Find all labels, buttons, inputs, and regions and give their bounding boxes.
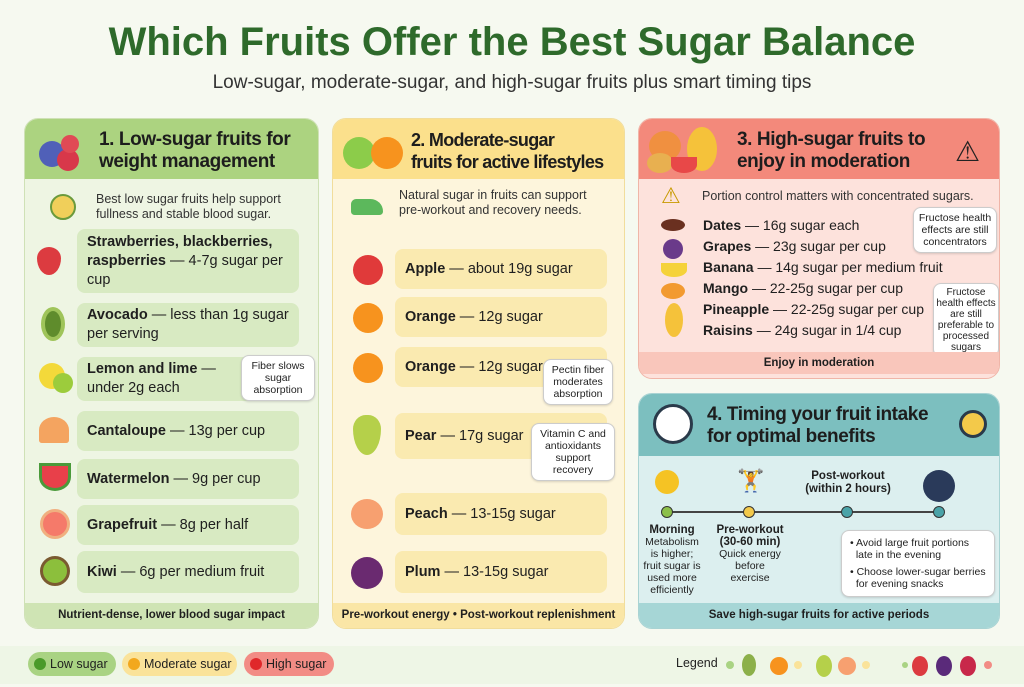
intro text: Natural sugar in fruits can support: [399, 188, 587, 202]
callout: evening: • Avoid large fruit portions: [850, 537, 969, 549]
footer: Nutrient-dense, lower blood sugar impact: [58, 609, 285, 621]
item: orange 2: [395, 347, 607, 387]
icon: badge: [50, 194, 76, 220]
item: apple: Apple — about 19g sugar: [405, 260, 573, 276]
callout: fructose 1: Fructose health effects are still concentrators: [919, 212, 991, 248]
item: kiwi: [77, 551, 299, 593]
list: high sugar fruits: Pineapple — 22-25g sugar per cup: [703, 301, 924, 317]
icon: warning: ⚠: [955, 136, 980, 167]
title: Which Fruits Offer the Best Sugar Balance: [109, 20, 915, 64]
subtitle: Low-sugar, moderate-sugar, and high-sugar fruits plus smart timing tips: [213, 72, 811, 93]
callout: vitamin c: [531, 423, 615, 481]
item: orange: Orange — 12g sugar: [405, 308, 543, 324]
callout: fiber: Fiber slows sugar absorption: [251, 360, 305, 396]
icon: apple orange: [343, 137, 403, 169]
heading: 2. Moderate-sugar: [411, 130, 554, 150]
icon: strawberry: [37, 247, 61, 275]
item: lemon: Lemon and lime —: [87, 361, 216, 377]
footer: Save high-sugar fruits for active periods: [709, 609, 929, 621]
heading: [411, 130, 604, 172]
timeline: (within 2 hours): [805, 483, 891, 495]
icon: warning small: ⚠: [661, 183, 681, 208]
item: berries: Strawberries, blackberries, raspberries — 4-7g sugar per cup: [87, 234, 283, 288]
header: moderate: [333, 119, 624, 179]
list: high sugar fruits: Grapes — 23g sugar per cup: [703, 238, 886, 254]
callout: fructose 1: [913, 207, 997, 253]
callout: pectin: [543, 359, 613, 405]
timeline: Post-workout: [811, 470, 885, 482]
pill: high: [244, 652, 334, 676]
timeline: exercise: [730, 572, 770, 584]
footer: Pre-workout energy • Post-workout replenishment: [342, 609, 615, 621]
heading: 1. Low-sugar fruits for: [99, 129, 290, 150]
item: plum: Plum — 13-15g sugar: [405, 564, 548, 580]
heading: [707, 404, 928, 447]
heading: 4. Timing your fruit intake: [707, 404, 928, 425]
heading: [99, 129, 290, 172]
legend icons: [676, 654, 992, 677]
callout: fructose 2: Fructose health effects are still preferable to processed sugars: [936, 287, 996, 353]
pill: moderate: [122, 652, 237, 676]
list: high sugar fruits: Raisins — 24g sugar in 1/4 cup: [703, 322, 901, 338]
callout: evening: [841, 530, 995, 597]
item: kiwi: Kiwi — 6g per medium fruit: [87, 564, 264, 580]
pill: low: [28, 652, 116, 676]
intro text: Portion control matters with concentrated sugars.: [702, 189, 974, 203]
item: peach: Peach — 13-15g sugar: [405, 506, 556, 522]
callout: pectin: Pectin fiber moderates absorption: [552, 364, 604, 400]
panel: low sugar: [24, 118, 319, 629]
panel: moderate sugar: [332, 118, 625, 629]
footer: [639, 352, 999, 374]
pill: moderate: Moderate sugar: [144, 657, 232, 671]
header: low sugar: [25, 119, 318, 179]
list: high sugar fruits: [661, 217, 943, 338]
callout: evening: late in the evening: [856, 549, 941, 561]
item: lemon: under 2g each: [87, 380, 180, 396]
item: avocado: Avocado — less than 1g sugar per serving: [87, 307, 289, 342]
heading: for optimal benefits: [707, 426, 875, 447]
callout: fiber: [241, 355, 315, 401]
heading: weight management: [99, 151, 275, 172]
item: pear: [395, 413, 607, 459]
callout: evening: for evening snacks: [856, 578, 943, 590]
item: pear: Pear — 17g sugar: [405, 428, 524, 444]
icon: tropical fruits: [647, 127, 717, 173]
list: high sugar fruits: Dates — 16g sugar each: [703, 217, 859, 233]
timeline: Quick energy: [719, 548, 781, 560]
item: grapefruit: Grapefruit — 8g per half: [87, 516, 248, 532]
timeline: 🏋: [737, 468, 764, 493]
intro text: [96, 192, 281, 221]
heading: [737, 129, 925, 172]
timeline: [643, 468, 955, 596]
heading: fruits for active lifestyles: [411, 152, 603, 172]
item: watermelon: Watermelon — 9g per cup: [87, 470, 261, 486]
intro text: Best low sugar fruits help support: [96, 192, 281, 206]
panel: high sugar: [638, 118, 1000, 379]
icon: berries: [39, 135, 79, 171]
pill: low: Low sugar: [50, 657, 108, 671]
item: peach: [395, 493, 607, 535]
item: apple: [395, 249, 607, 289]
legend icons: Legend: [676, 656, 718, 670]
icon: clock: [653, 404, 693, 444]
intro text: pre-workout and recovery needs.: [399, 203, 582, 217]
list: high sugar fruits: Banana — 14g sugar per medium fruit: [703, 259, 943, 275]
intro text: [399, 188, 587, 217]
icon: shoe: [351, 199, 383, 215]
item: lemon: [77, 357, 299, 401]
timeline: (30-60 min): [720, 536, 780, 548]
item: watermelon: [77, 459, 299, 499]
legend bar: [0, 646, 1024, 684]
item: cantaloupe: [77, 411, 299, 451]
header: timing: [639, 394, 999, 456]
callout: vitamin c: Vitamin C and antioxidants support recovery: [540, 428, 606, 476]
heading: enjoy in moderation: [737, 151, 910, 172]
footer: Enjoy in moderation: [764, 357, 874, 369]
icon: sun moon: [959, 410, 987, 438]
item: orange 2: Orange — 12g sugar: [405, 358, 543, 374]
timeline: Pre-workout: [716, 524, 784, 536]
timeline: Morning: [649, 524, 695, 536]
list: high sugar fruits: Mango — 22-25g sugar per cup: [703, 280, 903, 296]
pill: high: High sugar: [266, 657, 326, 671]
panel: timing: [638, 393, 1000, 629]
callout: evening: • Choose lower-sugar berries: [850, 566, 986, 578]
heading: 3. High-sugar fruits to: [737, 129, 925, 150]
footer: [639, 603, 999, 628]
item: cantaloupe: Cantaloupe — 13g per cup: [87, 422, 265, 438]
footer: [25, 603, 318, 628]
footer: [333, 603, 624, 628]
header: high: [639, 119, 999, 179]
timeline: Metabolism is higher; fruit sugar is used more efficiently: [643, 536, 701, 596]
item: orange: [395, 297, 607, 337]
item: grapefruit: [77, 505, 299, 545]
timeline: before: [735, 560, 765, 572]
item: plum: [395, 551, 607, 593]
intro text: fullness and stable blood sugar.: [96, 207, 271, 221]
